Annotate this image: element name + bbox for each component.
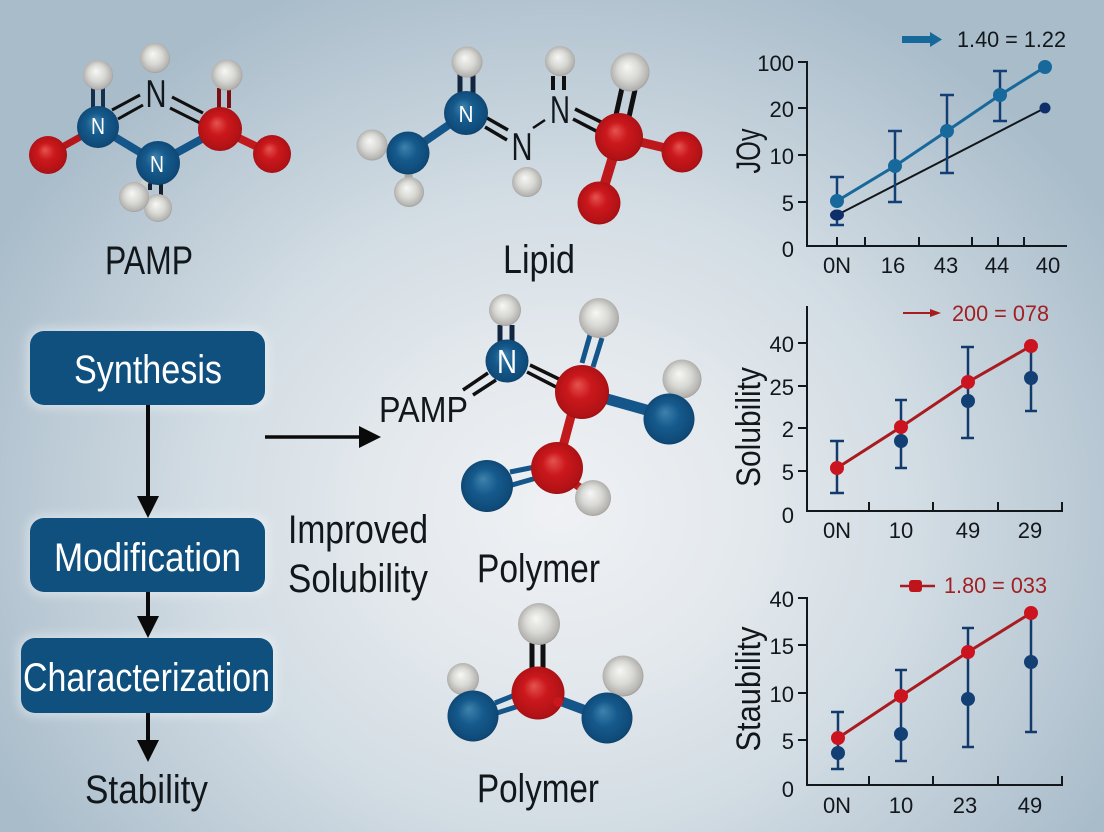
x tick labels: 23 xyxy=(953,793,977,818)
atom labels: PAMP xyxy=(379,389,468,430)
x tick labels: 29 xyxy=(1018,518,1042,543)
y axis title: Solubility xyxy=(730,367,768,487)
atoms xyxy=(356,46,702,224)
arrow: process to polymer xyxy=(265,435,359,439)
x tick labels: 0N xyxy=(823,253,851,278)
y tick labels: 25 xyxy=(770,375,794,400)
y tick labels: 0 xyxy=(782,503,794,528)
y axis title: Staubility xyxy=(730,626,768,752)
y tick labels xyxy=(770,587,794,802)
text: Improved Solubility xyxy=(288,508,428,601)
atom labels xyxy=(91,73,166,177)
y axis title: JOy xyxy=(730,128,768,174)
series: lower xyxy=(830,102,1050,225)
series: blue with error bars xyxy=(830,346,1038,493)
bonds xyxy=(463,325,650,491)
y tick labels: 20 xyxy=(770,97,794,122)
atoms xyxy=(461,294,702,516)
molecule: PAMP-modified polymer xyxy=(379,294,702,516)
y tick labels: 15 xyxy=(770,634,794,659)
y tick labels xyxy=(770,332,794,528)
legend xyxy=(900,573,1047,598)
series: red xyxy=(831,606,1038,745)
atom labels: N xyxy=(91,113,105,139)
y tick labels: 10 xyxy=(770,682,794,707)
x tick labels: 16 xyxy=(881,253,905,278)
legend xyxy=(902,27,1066,52)
atoms xyxy=(447,603,644,744)
legend xyxy=(903,301,1049,326)
y tick labels: 0 xyxy=(782,237,794,262)
y tick labels: 40 xyxy=(770,587,794,612)
axes xyxy=(798,62,1067,246)
bonds xyxy=(495,642,590,713)
molecule: Polymer xyxy=(447,603,644,744)
series: red xyxy=(830,339,1038,475)
step: Synthesis: Synthesis xyxy=(74,348,222,392)
text: Improved Solubility: Solubility xyxy=(288,557,428,601)
step: Synthesis xyxy=(30,331,265,405)
x tick labels: 0N xyxy=(823,793,851,818)
x tick labels: 44 xyxy=(985,253,1009,278)
y tick labels: 40 xyxy=(770,332,794,357)
y tick labels: 100 xyxy=(757,51,794,76)
y tick labels xyxy=(757,51,794,262)
atom labels: N xyxy=(512,126,532,169)
box glows xyxy=(18,328,276,716)
arrow: characterization to stability xyxy=(146,713,150,740)
text: Improved Solubility: Improved xyxy=(288,508,428,552)
atom labels xyxy=(458,89,570,169)
step: Modification: Modification xyxy=(54,536,241,580)
axes xyxy=(798,598,1063,785)
atom labels: N xyxy=(550,89,570,132)
atom labels: N xyxy=(146,73,166,116)
x tick labels: 49 xyxy=(956,518,980,543)
legend: 1.40 = 1.22 xyxy=(957,27,1066,52)
label: Stability: Stability xyxy=(85,768,208,812)
series: upper xyxy=(830,60,1052,208)
x tick labels xyxy=(823,793,1042,818)
y tick labels: 2 xyxy=(782,417,794,442)
bonds xyxy=(48,88,272,195)
arrow: modification to characterization xyxy=(146,592,150,616)
atom labels: N xyxy=(458,101,474,127)
label: Polymer top: Polymer xyxy=(477,547,600,591)
atom labels: N xyxy=(150,151,164,177)
chart: Stability xyxy=(730,573,1063,818)
x tick labels xyxy=(823,518,1042,543)
molecule: Lipid xyxy=(356,46,702,224)
x tick labels: 49 xyxy=(1018,793,1042,818)
axes xyxy=(798,306,1063,511)
series: blue with error bars xyxy=(831,613,1038,769)
x tick labels: 40 xyxy=(1036,253,1060,278)
legend: 1.80 = 033 xyxy=(944,573,1047,598)
step: Characterization xyxy=(21,638,273,713)
label: Lipid: Lipid xyxy=(503,238,575,282)
step: Modification xyxy=(30,518,265,592)
y tick labels: 0 xyxy=(782,777,794,802)
label: Polymer bottom: Polymer xyxy=(477,767,599,811)
atom labels: N xyxy=(497,343,517,380)
y tick labels: 10 xyxy=(770,144,794,169)
flowchart xyxy=(18,328,276,812)
legend: 200 = 078 xyxy=(952,301,1049,326)
arrow: synthesis to modification xyxy=(146,405,150,496)
y tick labels: 5 xyxy=(782,460,794,485)
bonds xyxy=(372,74,682,203)
atom labels xyxy=(379,343,517,430)
atoms xyxy=(29,43,291,222)
label: PAMP: PAMP xyxy=(105,239,193,283)
chart: top line chart (JOy) xyxy=(730,27,1067,278)
molecule: PAMP xyxy=(29,43,291,222)
x tick labels: 10 xyxy=(889,793,913,818)
x tick labels: 10 xyxy=(889,518,913,543)
chart: Solubility xyxy=(730,301,1063,543)
y tick labels: 5 xyxy=(782,191,794,216)
x tick labels: 0N xyxy=(823,518,851,543)
x tick labels: 43 xyxy=(934,253,958,278)
x tick labels xyxy=(823,253,1060,278)
y tick labels: 5 xyxy=(782,729,794,754)
step: Characterization: Characterization xyxy=(23,656,270,700)
